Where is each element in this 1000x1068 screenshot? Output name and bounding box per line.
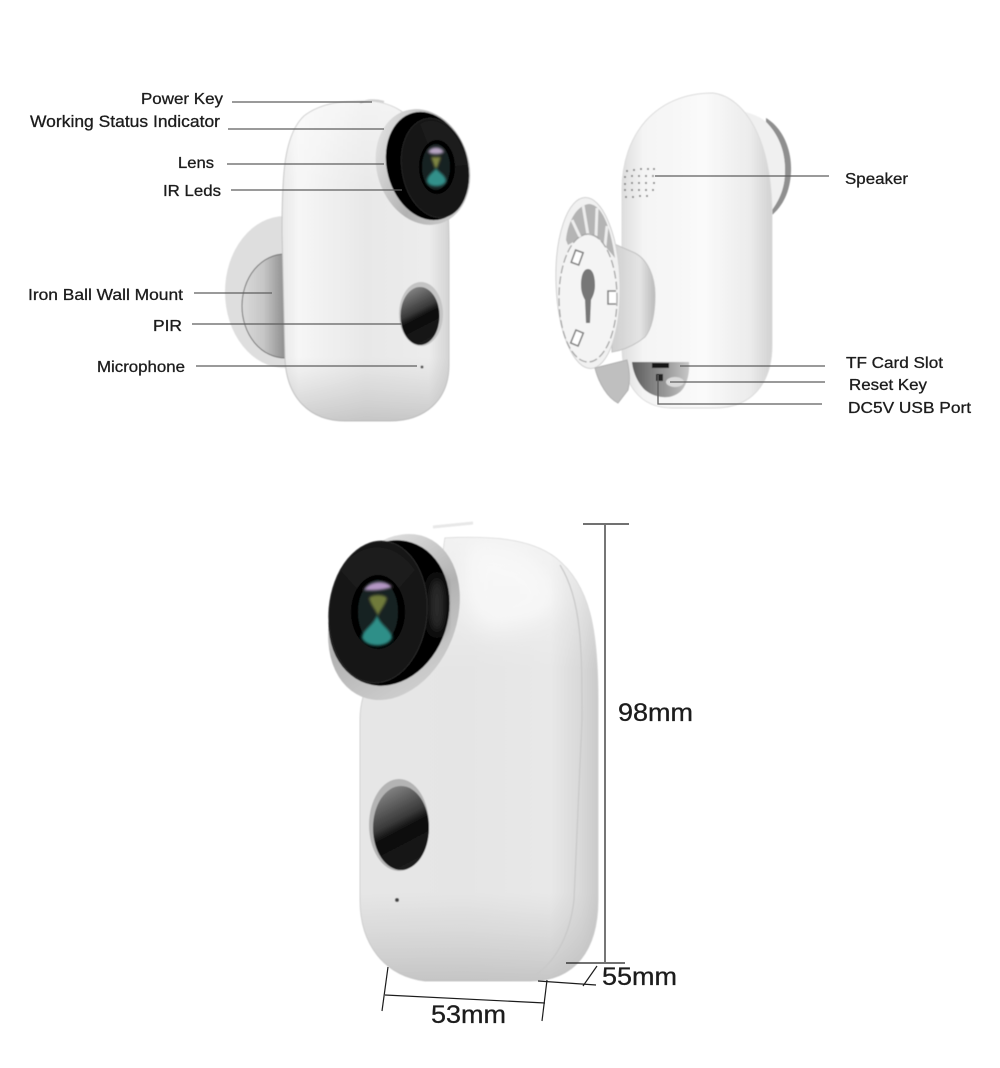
lens glass [419,140,455,194]
label: DC5V USB Port: DC5V USB Port [848,400,972,417]
label: Power Key: Power Key [141,91,223,108]
side seam [530,565,582,978]
highlight [462,545,556,633]
camera body [360,537,598,981]
lens face [323,537,433,687]
disc ribs [572,205,607,246]
power key [360,100,384,103]
PIR sensor [369,779,429,871]
dimensions [382,524,693,1029]
microphone hole [395,898,399,902]
microphone hole [420,366,424,368]
iron ball [242,254,328,358]
label: Iron Ball Wall Mount: Iron Ball Wall Mount [28,287,184,304]
barrel gleam [430,577,444,633]
label: PIR: PIR [153,318,182,335]
camera: rear-side view [553,93,791,408]
label: IR Leds: IR Leds [163,183,221,200]
mount disc rim [553,196,623,370]
camera: dimension view [304,514,598,981]
labels: rear-side view [655,171,972,417]
PIR sensor [399,282,443,346]
mounting slots [571,250,616,346]
label: TF Card Slot: TF Card Slot [846,355,944,372]
width dimension lines [382,967,547,1021]
reset key [666,377,684,387]
mount stem [612,243,655,352]
lens black barrel [310,524,468,702]
height dimension lines [566,524,629,963]
disc face [559,235,617,361]
leader lines [192,102,417,366]
depth dimension lines [538,966,597,986]
label: 98mm: 98mm [618,699,693,727]
port cavity [632,362,689,397]
wall mount plate [225,216,345,368]
camera body [622,93,772,408]
lens silver ring [304,514,484,720]
disc rib recess [566,204,615,258]
label: 55mm: 55mm [602,963,677,991]
rim dashes [559,234,617,362]
USB port [656,374,663,381]
rear lens dome rim [766,118,791,216]
lens face [394,113,476,223]
label: Working Status Indicator: Working Status Indicator [30,113,221,131]
leader lines [655,176,829,404]
keyhole [581,269,595,323]
lens housing [361,97,485,237]
stand flap [595,360,629,403]
label: Speaker: Speaker [845,171,909,188]
camera body [282,101,449,421]
label: Lens: Lens [178,155,214,172]
TF card slot [652,363,669,368]
labels: front-left view [28,91,417,376]
lens glass [351,575,405,649]
label: 53mm: 53mm [431,1001,506,1029]
label: Microphone: Microphone [97,359,185,376]
camera: front-left view [225,97,485,421]
black barrel [374,103,480,229]
power key [433,523,473,527]
speaker grille [624,168,655,198]
label: Reset Key: Reset Key [849,377,927,394]
